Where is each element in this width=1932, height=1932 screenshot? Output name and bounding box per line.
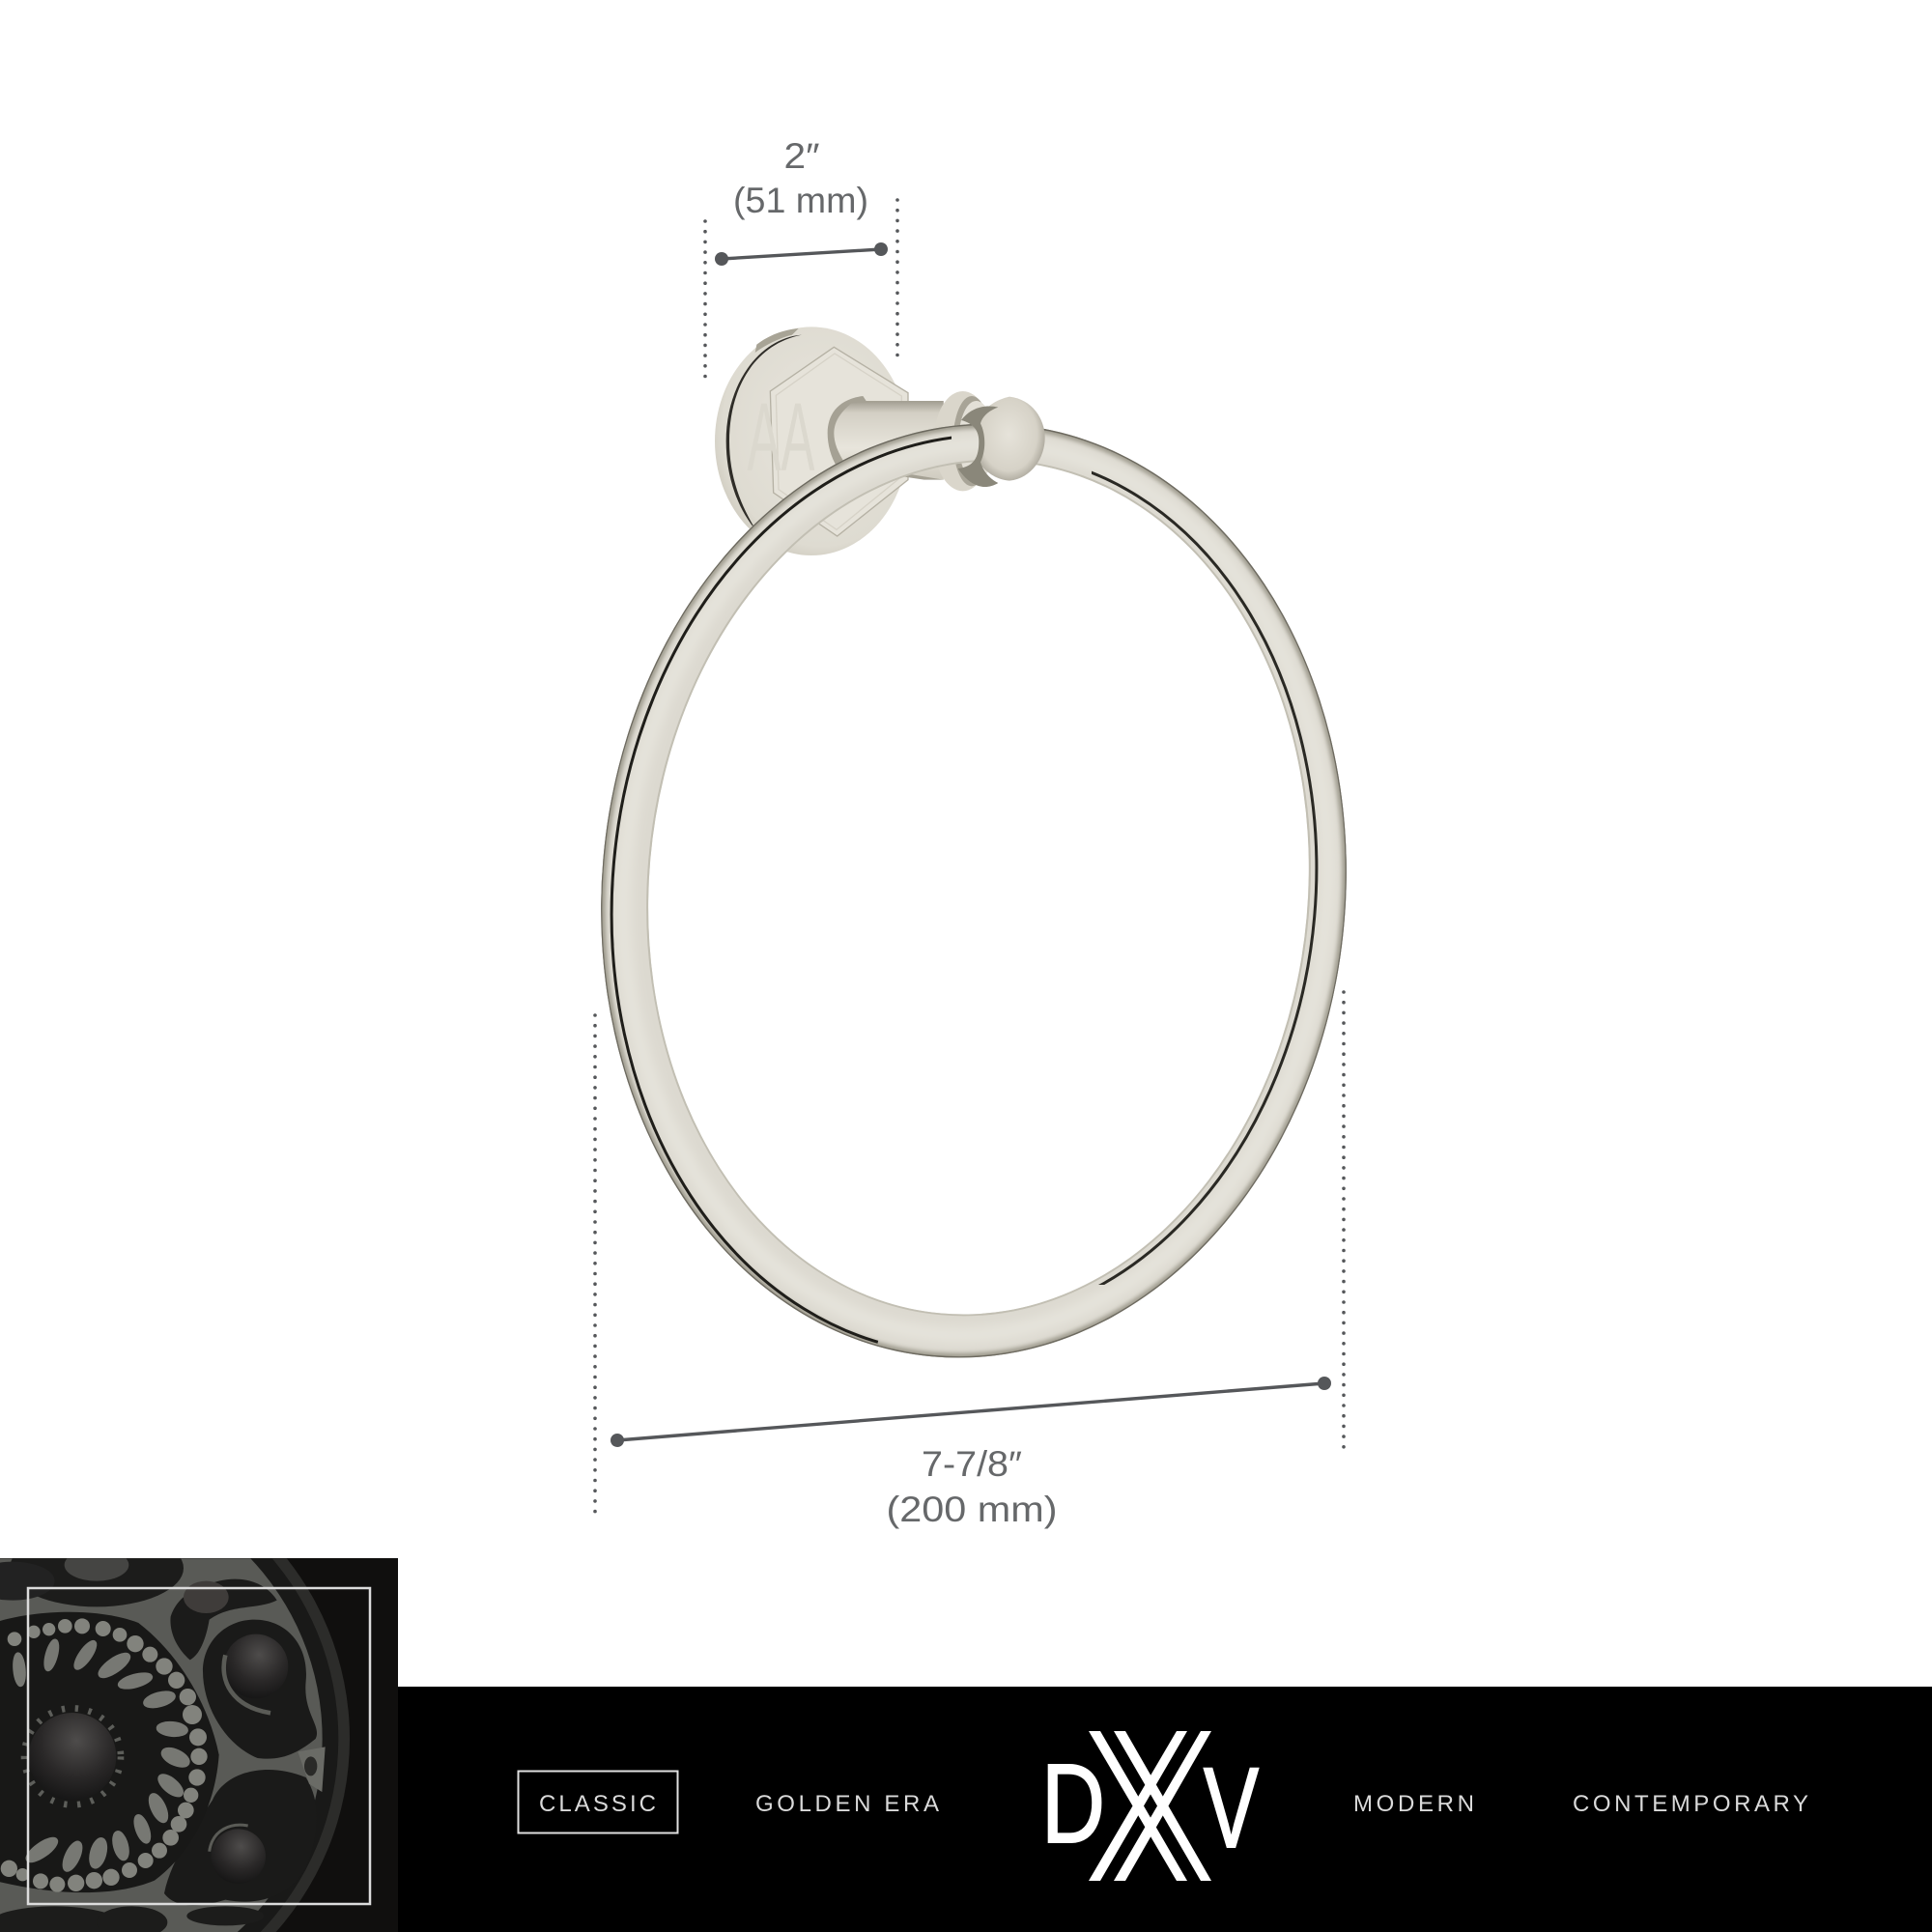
panel: ornament photo [0, 1558, 398, 1932]
end knob [958, 397, 1045, 487]
label: 51 mm: (51 mm) [733, 181, 868, 220]
central boss [29, 1713, 116, 1789]
ring loop [601, 424, 1347, 1358]
beaded medallion [0, 1612, 219, 1892]
label: 2 inch: 2″ [784, 136, 819, 176]
collar [934, 391, 994, 491]
mounting arm [828, 396, 944, 480]
top leaves [170, 1579, 277, 1660]
measure line [611, 1377, 1331, 1447]
classic selected box: CLASSIC [539, 1791, 656, 1817]
modern: MODERN [1353, 1791, 1474, 1817]
dotted guide left [703, 221, 707, 379]
petals [13, 1638, 191, 1873]
label: 200 mm: (200 mm) [887, 1490, 1057, 1529]
DXV logo: D [1041, 1741, 1105, 1866]
DXV logo [1041, 1731, 1259, 1881]
black footer bar [398, 1687, 1932, 1932]
left dark reflection [611, 437, 952, 1344]
hexagon plate [747, 347, 908, 536]
lower right scroll [164, 1770, 317, 1905]
rays [24, 1708, 121, 1804]
ornament medallion [0, 1558, 350, 1932]
dotted guide left [593, 1015, 597, 1513]
faint monogram: AA [747, 384, 814, 492]
dimension: 2 inch mount width [705, 136, 897, 379]
golden era: GOLDEN ERA [755, 1791, 939, 1817]
dimension: 7-7/8 inch ring width [595, 992, 1344, 1529]
dotted guide right [895, 200, 899, 357]
right dark reflection [1092, 471, 1318, 1285]
dotted guide right [1342, 992, 1346, 1455]
DXV logo: V [1204, 1745, 1259, 1872]
towel ring product [562, 327, 1385, 1389]
contemporary: CONTEMPORARY [1573, 1791, 1808, 1817]
wall rosette [715, 327, 994, 555]
top scroll [11, 1559, 184, 1607]
measure line [715, 242, 888, 266]
inset frame [28, 1588, 370, 1904]
classic selected box [518, 1772, 678, 1833]
upper right scroll [203, 1620, 317, 1759]
bottom scrolls [0, 1906, 104, 1932]
style scale navigation [518, 1772, 1808, 1833]
label: 7-7/8 inch: 7-7/8″ [922, 1444, 1022, 1484]
